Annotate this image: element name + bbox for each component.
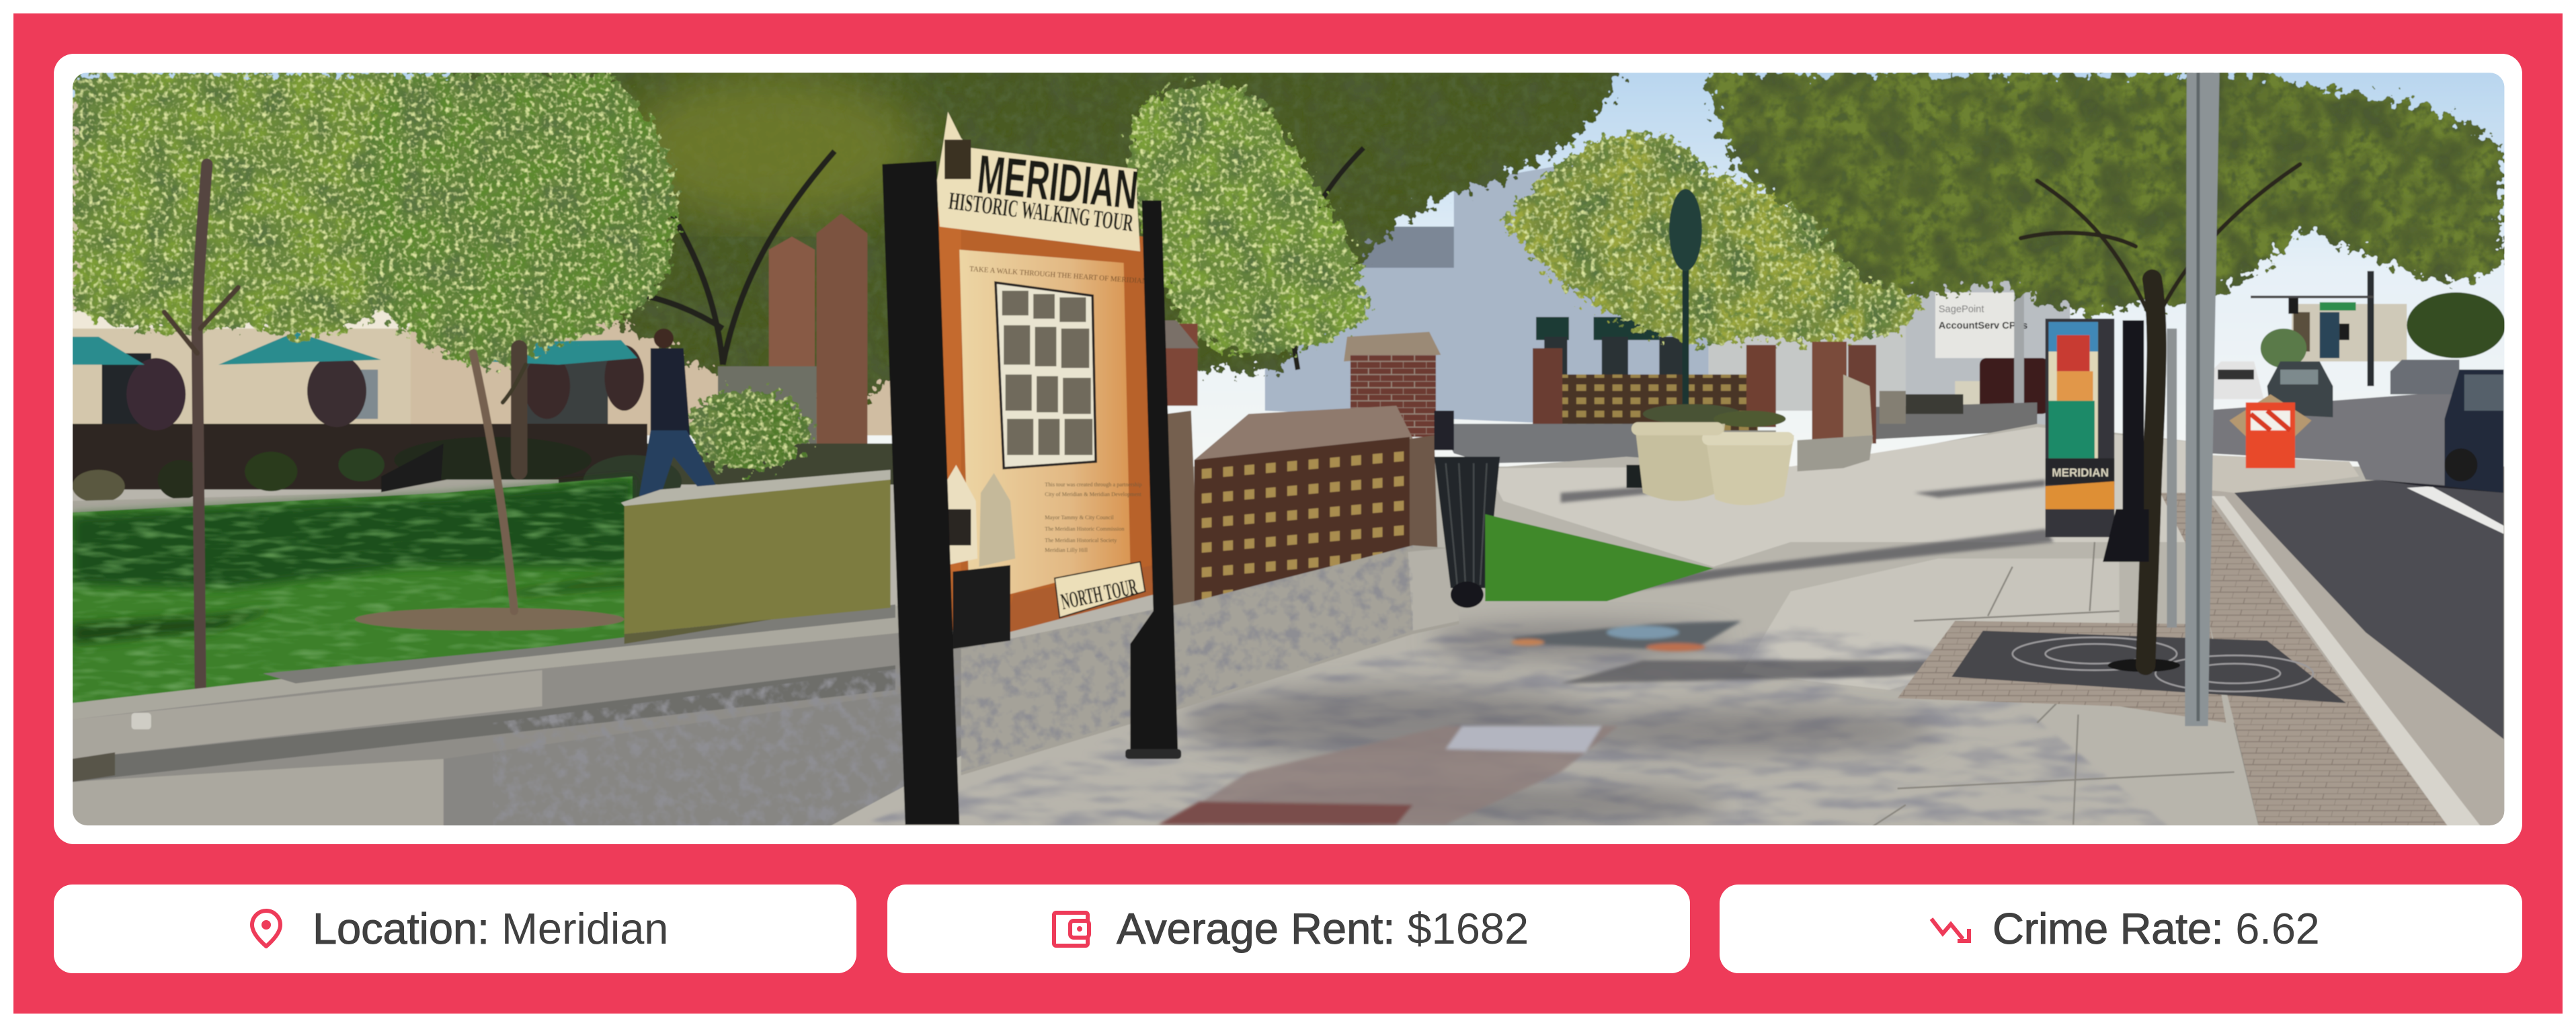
shop signage and corner building — [1906, 271, 2070, 427]
stat pill: average rent — [887, 885, 1690, 973]
photo: Meridian historic walking tour street scene — [73, 73, 2505, 825]
walking tour sign board: TAKE A WALK THROUGH THE HEART OF MERIDIAN'S — [969, 265, 1153, 286]
poster small text: The Meridian Historical Society — [1045, 538, 1117, 544]
header title text: MERIDIAN — [975, 144, 1141, 221]
poster small text: City of Meridian & Meridian Development — [1045, 491, 1142, 497]
soft shade blotches — [1183, 622, 1939, 828]
large right canopy — [1709, 73, 2503, 314]
tree branches background — [611, 148, 1363, 370]
metal sign pole — [2167, 73, 2220, 726]
average rent label and value: Average Rent: $1682 — [1117, 904, 1529, 953]
icon: trending down arrow — [1929, 917, 1971, 943]
curb and gutter — [2202, 489, 2503, 826]
plaza low brick wall — [1529, 345, 1776, 455]
park path — [73, 480, 559, 513]
map kiosk: MERIDIAN — [2052, 466, 2109, 479]
photo ground base — [73, 466, 2505, 825]
poster photo grid — [996, 282, 1096, 468]
background buildings — [73, 99, 1939, 452]
black lamp post — [2103, 321, 2149, 562]
cream header banner — [936, 112, 1140, 251]
tree trunk right — [2021, 164, 2300, 665]
poster small text: Mayor Tammy & City Council — [1045, 514, 1115, 520]
black sign posts — [882, 161, 1181, 825]
street asphalt — [2202, 388, 2503, 739]
north tour plaque — [1055, 562, 1145, 618]
chalk art on pavement — [1158, 621, 1742, 825]
lower frame strip — [1002, 565, 1154, 634]
icon: map pin — [250, 909, 282, 949]
memorial wall concrete base — [961, 545, 1459, 776]
hedges and dark fence — [73, 345, 682, 507]
dappled shade on sidewalk — [854, 621, 2169, 826]
trunks of foreground trees — [164, 164, 526, 687]
pavers brick strip — [1898, 493, 2448, 826]
location label and value: Location: Meridian — [313, 904, 668, 953]
distant street: signals, buildings, cars — [2208, 271, 2505, 493]
stone planters with flowers — [1632, 404, 1794, 505]
poster panel — [959, 250, 1130, 604]
trash can — [1435, 411, 1500, 608]
light green foreground trees canopies — [73, 73, 1367, 366]
shop signage and corner building: SagePoint — [1939, 304, 1984, 315]
small lawn — [1485, 514, 1714, 602]
slab joints — [1873, 542, 2259, 826]
stat pill: crime rate — [1720, 885, 2522, 973]
person walking — [639, 329, 717, 496]
shop signage and corner building: AccountServ CPAs — [1939, 321, 2027, 331]
long shadows — [1561, 480, 2070, 684]
bell tower cutout top — [944, 140, 971, 179]
green utility box — [621, 470, 891, 644]
wooden frame — [936, 206, 1154, 634]
orange barricade — [2229, 395, 2312, 468]
tree grate — [1951, 630, 2346, 703]
mottling on foreground wall — [493, 657, 985, 826]
icon: wallet — [1052, 911, 1091, 948]
lawn — [73, 477, 633, 703]
yellow-green tree at the plaza — [1503, 133, 1922, 345]
walking tour sign board: NORTH TOUR — [1059, 574, 1139, 615]
green shrubs — [685, 389, 810, 471]
black brochure box — [953, 565, 1010, 649]
sidewalk — [830, 424, 2489, 826]
poster small text: Meridian Lilly Hill — [1045, 547, 1088, 553]
concrete foreground wall — [73, 591, 985, 826]
sky — [73, 73, 2505, 466]
bench and street furniture — [1626, 391, 1963, 488]
mottling on memorial base — [961, 545, 1413, 772]
house illustration cutout — [940, 465, 977, 567]
stone entry sign wall — [1798, 341, 1876, 471]
map kiosk — [2046, 319, 2114, 537]
walking tour sign board — [936, 112, 1154, 649]
white photo card — [54, 54, 2522, 844]
poster small text — [1045, 481, 1142, 553]
crime rate label and value: Crime Rate: 6.62 — [1993, 904, 2320, 953]
memorial brick wall — [1158, 321, 1441, 611]
walking tour sign board: HISTORIC WALKING TOUR — [947, 187, 1135, 237]
olive sunlit leaves upper-left of dark mass — [625, 74, 920, 222]
teal umbrellas — [73, 332, 637, 365]
stat pill: location — [54, 885, 856, 973]
poster small text: This tour was created through a partnership — [1045, 481, 1142, 487]
dark tree mass behind sign — [444, 49, 1626, 395]
clock lamp post — [1669, 189, 1702, 411]
poster small text: The Meridian Historic Commission — [1045, 526, 1125, 532]
brick columns behind — [633, 214, 895, 485]
road and tarmac behind — [1437, 403, 2037, 463]
